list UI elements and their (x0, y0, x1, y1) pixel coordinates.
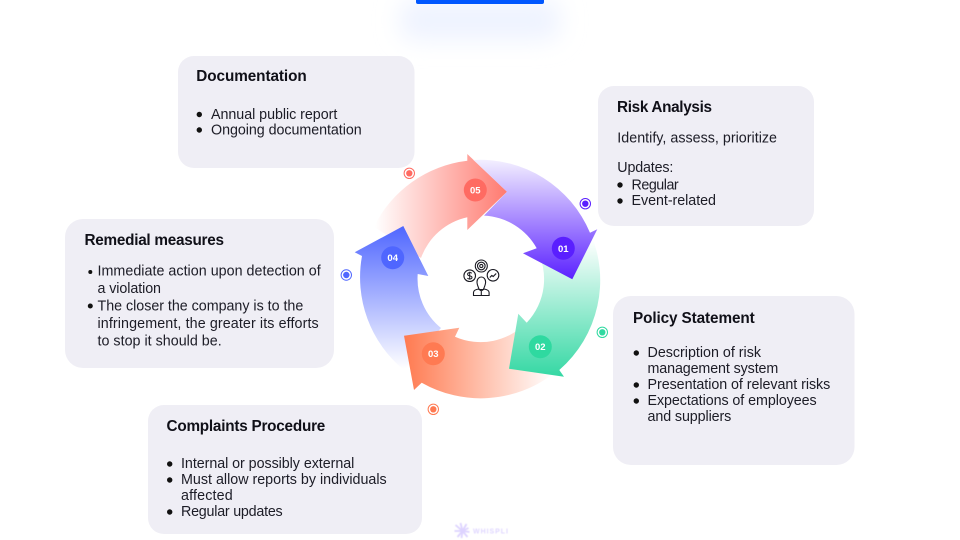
marker dot: orange (428, 404, 438, 414)
marker dot: green (597, 327, 608, 337)
heading: Policy Statement: Policy Statement (633, 310, 755, 327)
heading: Documentation: Documentation (196, 68, 307, 85)
step badge 02 (529, 335, 552, 358)
step badge 01 (552, 237, 575, 260)
arrow 01 (474, 160, 597, 279)
bullet list: Remedial measures: to stop it should be. (98, 334, 222, 350)
bullet list: Policy Statement: Expectations of employees (648, 393, 817, 409)
bullet list: Policy Statement: and suppliers (648, 409, 731, 425)
marker dot: purple (580, 198, 590, 209)
step badge 03 (422, 342, 445, 365)
marker dot: red (404, 168, 414, 178)
bullet list: Remedial measures: a violation (98, 281, 161, 297)
arrow 05 (374, 154, 507, 258)
step badge 05 (464, 178, 487, 202)
bullet list: Updates: Event-related (632, 193, 716, 209)
watermark logo (454, 523, 508, 538)
bullet list: Remedial measures: infringement, the greater its efforts (98, 316, 319, 332)
bullet list: Documentation: Ongoing documentation (211, 122, 362, 138)
bullet list: Complaints Procedure: Internal or possibly external (181, 456, 354, 472)
marker dot: blue (341, 270, 351, 280)
arrow 03 (404, 322, 553, 398)
top glow (400, 0, 560, 40)
step badge 03: 03 (428, 349, 439, 360)
panel: Risk Analysis (598, 86, 814, 226)
bullet list: Updates: Regular (632, 177, 679, 193)
icon: whispli star (454, 523, 470, 538)
step badge 04 (381, 246, 404, 269)
bullet list: Remedial measures: The closer the company is to the (98, 298, 303, 314)
step badge 04: 04 (387, 253, 399, 264)
panel: Complaints Procedure (148, 405, 422, 534)
bullet list: Policy Statement: Description of risk (648, 345, 762, 361)
bullet list: Documentation (197, 107, 362, 138)
bullet list: Complaints Procedure: affected (181, 488, 233, 504)
bullet list: Remedial measures: Immediate action upon detection of (98, 263, 321, 279)
wordmark: WHISPLI (473, 528, 508, 536)
text: Updates: Updates: (617, 160, 673, 176)
heading: Risk Analysis: Risk Analysis (617, 99, 712, 116)
heading: Complaints Procedure: Complaints Procedure (166, 418, 325, 435)
bullet list: Complaints Procedure (167, 456, 387, 520)
bullet list: Policy Statement: management system (648, 361, 778, 377)
bullet list: Complaints Procedure: Must allow reports by individuals (181, 472, 387, 488)
panel: Documentation (178, 56, 414, 168)
bullet list: Remedial measures (88, 263, 321, 350)
cycle diagram (355, 154, 600, 398)
step badge 05: 05 (470, 186, 481, 196)
bullet list: Documentation: Annual public report (211, 107, 337, 123)
panel: Policy Statement (613, 296, 854, 465)
panel: Remedial measures (65, 219, 334, 368)
arrow 02 (509, 232, 600, 377)
heading: Remedial measures: Remedial measures (84, 232, 224, 249)
bullet list: Policy Statement (634, 345, 830, 425)
arrow 04 (355, 226, 441, 370)
bullet list: Complaints Procedure: Regular updates (181, 504, 283, 520)
bullet list: Updates (617, 177, 716, 209)
text: Identify: Identify, assess, prioritize (617, 130, 777, 146)
top bar (416, 0, 544, 4)
icon: person juggling target, dollar and growth (464, 260, 499, 296)
bullet list: Policy Statement: Presentation of relevant risks (648, 377, 830, 393)
step badge 01: 01 (558, 244, 569, 255)
step badge 02: 02 (535, 342, 546, 353)
